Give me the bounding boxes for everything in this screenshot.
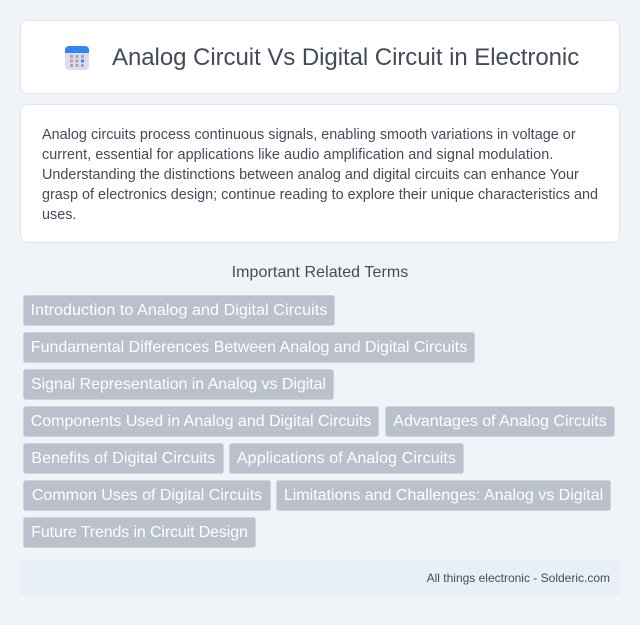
heading: important related terms: Important Related Terms [232,264,408,281]
title: Analog Circuit Vs Digital Circuit in Electronic [112,44,579,71]
chip [23,332,475,363]
chip [276,480,611,511]
text block: introduction: Understanding the distinctions between analog and digital circuits can enhance Your [42,167,579,183]
chip: Benefits of Digital Circuits [31,450,216,467]
chip [229,443,464,474]
panel: header [20,20,620,94]
chip [385,406,615,437]
chip [23,443,224,474]
chip: Components Used in Analog and Digital Circuits [31,413,371,430]
chip: Limitations and Challenges: Analog vs Digital [284,487,603,504]
text block: introduction: uses. [42,207,76,223]
text block: introduction: grasp of electronics design; continue reading to explore their unique characteristics and [42,187,598,203]
footer [20,561,620,595]
chip [23,295,335,326]
chip [23,406,379,437]
chip [23,369,334,400]
footer: All things electronic - Solderic.com [427,571,610,585]
panel: introduction [20,104,620,243]
text block: introduction: Analog circuits process continuous signals, enabling smooth variations in voltage or [42,127,576,143]
text block: introduction: current, essential for applications like audio amplification and signal modulation. [42,147,553,163]
chip [23,480,271,511]
chip: Introduction to Analog and Digital Circuits [31,302,327,319]
chip: Advantages of Analog Circuits [393,413,607,430]
icon: calendar grid [65,46,89,70]
text block: introduction [42,127,598,223]
chip group: related terms [23,295,615,548]
chip: Common Uses of Digital Circuits [32,487,262,504]
chip: Signal Representation in Analog vs Digital [31,376,326,393]
chip: Fundamental Differences Between Analog and Digital Circuits [31,339,467,356]
chip [23,517,256,548]
chip: Future Trends in Circuit Design [31,524,248,541]
chip: Applications of Analog Circuits [237,450,456,467]
